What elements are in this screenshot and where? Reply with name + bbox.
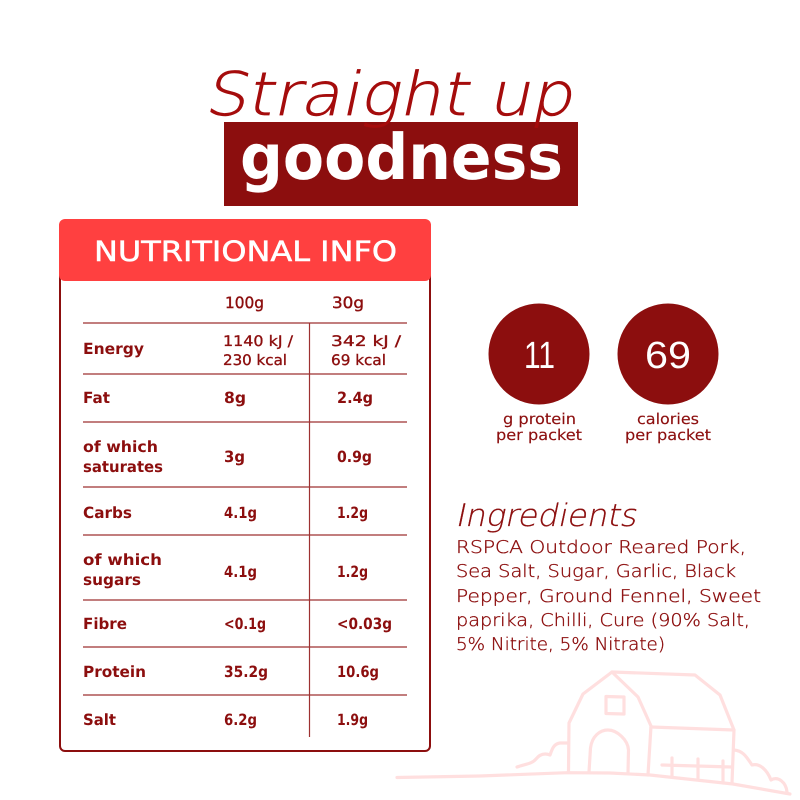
- row: carbs: Carbs: [83, 504, 132, 522]
- row: carbs: [83, 504, 368, 522]
- text block: ingredients list: RSPCA Outdoor Reared Pork,: [456, 538, 746, 558]
- stat: protein per packet: 11: [524, 335, 555, 377]
- row: salt: [83, 711, 368, 729]
- stat: protein per packet: [488, 304, 590, 444]
- row: saturates: 0.9g: [337, 448, 372, 466]
- text block: ingredients list: [456, 538, 761, 655]
- row: protein: 10.6g: [337, 663, 379, 681]
- row: saturates: [83, 438, 372, 476]
- panel: nutritional info table: [59, 219, 431, 751]
- row: salt: 6.2g: [224, 711, 257, 729]
- row: saturates: 3g: [224, 448, 245, 466]
- stat: calories per packet: per packet: [625, 426, 711, 444]
- panel header: NUTRITIONAL INFO: [94, 235, 397, 268]
- row: salt: Salt: [83, 711, 117, 729]
- row: protein: 35.2g: [224, 663, 268, 681]
- row: salt: 1.9g: [337, 711, 368, 729]
- text block: ingredients list: Sea Salt, Sugar, Garlic, Black: [456, 562, 736, 582]
- stat: protein per packet: per packet: [496, 426, 582, 444]
- row: sugars: [83, 551, 368, 589]
- row: energy: 69 kcal: [331, 353, 386, 369]
- row: fibre: <0.1g: [224, 615, 266, 633]
- row: energy: 342 kJ /: [331, 334, 401, 350]
- column headings: 30g: [332, 294, 364, 312]
- row: fat: 2.4g: [337, 389, 373, 407]
- row: energy: Energy: [83, 340, 144, 358]
- row: fibre: [83, 615, 392, 633]
- row: sugars: 1.2g: [337, 563, 368, 581]
- row: sugars: 4.1g: [224, 563, 257, 581]
- stat: calories per packet: 69: [645, 335, 691, 377]
- column headings: 100g: [225, 294, 264, 312]
- stat: protein per packet: g protein: [503, 410, 576, 428]
- row: energy: 1140 kJ /: [223, 334, 293, 350]
- panel header: [59, 219, 431, 281]
- row: fibre: <0.03g: [337, 615, 392, 633]
- row: protein: [83, 663, 379, 681]
- title: Straight up: Straight up: [201, 60, 584, 130]
- row: carbs: 1.2g: [337, 504, 368, 522]
- row: fat: Fat: [83, 389, 111, 407]
- row: carbs: 4.1g: [224, 504, 257, 522]
- icon: barn outline: [397, 672, 790, 794]
- row: fat: [83, 389, 373, 407]
- row: energy: [83, 334, 401, 369]
- column headings: [225, 294, 364, 312]
- row: saturates: of which: [83, 438, 158, 456]
- row: saturates: saturates: [83, 458, 163, 476]
- row: sugars: of which: [83, 551, 162, 569]
- text block: ingredients list: 5% Nitrite, 5% Nitrate): [456, 635, 665, 655]
- text block: ingredients list: Pepper, Ground Fennel, Sweet: [456, 587, 761, 607]
- text block: ingredients list: paprika, Chilli, Cure (90% Salt,: [456, 611, 750, 631]
- row: fibre: Fibre: [83, 615, 127, 633]
- heading banner: goodness: goodness: [240, 121, 563, 194]
- row: energy: 230 kcal: [223, 353, 287, 369]
- row: protein: Protein: [83, 663, 146, 681]
- row: sugars: sugars: [83, 571, 141, 589]
- row: fat: 8g: [224, 389, 246, 407]
- heading: ingredients: Ingredients: [453, 498, 642, 534]
- stat: calories per packet: [618, 304, 718, 444]
- stat: calories per packet: calories: [637, 410, 699, 428]
